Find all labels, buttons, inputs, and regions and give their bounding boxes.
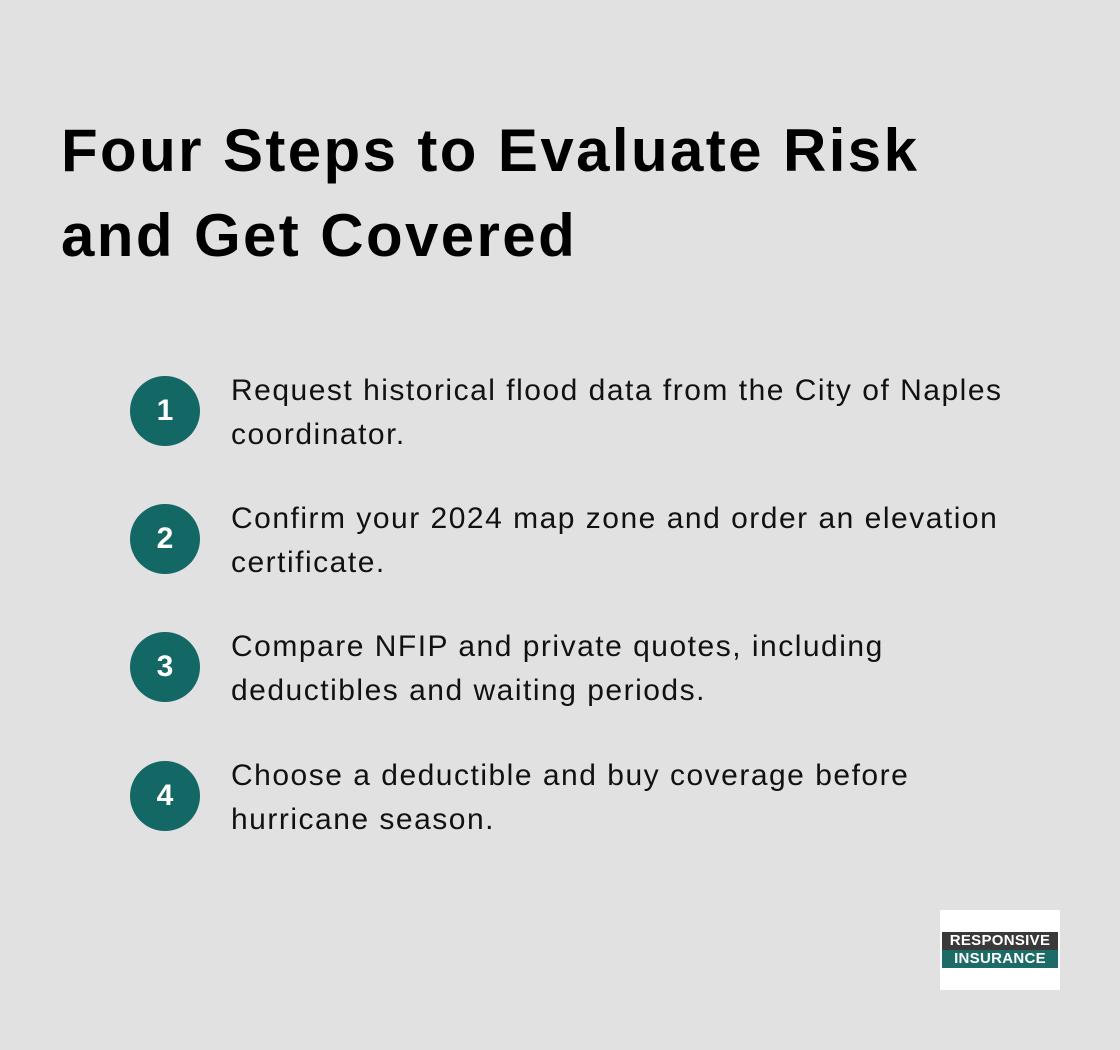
icon: number 4	[130, 761, 200, 831]
step 2 text	[231, 502, 998, 579]
step 3 text	[231, 630, 884, 707]
logo: RESPONSIVE	[950, 932, 1050, 949]
step 4 text: Choose a deductible and buy coverage before	[231, 759, 909, 792]
step 3 text: deductibles and waiting periods.	[231, 674, 706, 707]
icon: number 1: 1	[157, 394, 173, 427]
step 2 text: Confirm your 2024 map zone and order an elevation	[231, 502, 998, 535]
step 2 text: certificate.	[231, 546, 386, 579]
logo	[940, 910, 1060, 990]
icon: number 2	[130, 504, 200, 574]
title	[61, 117, 919, 269]
logo: INSURANCE	[954, 950, 1046, 967]
icon: number 3	[130, 632, 200, 702]
icon: number 3: 3	[157, 650, 173, 683]
step 4 text: hurricane season.	[231, 803, 495, 836]
title: and Get Covered	[61, 202, 577, 269]
icon: number 1	[130, 376, 200, 446]
title: Four Steps to Evaluate Risk	[61, 117, 919, 184]
step 1 text: coordinator.	[231, 418, 406, 451]
step 3	[130, 630, 884, 707]
step 4 text	[231, 759, 909, 836]
icon: number 4: 4	[157, 779, 173, 812]
icon: number 2: 2	[157, 522, 173, 555]
step 2	[130, 502, 998, 579]
step 1 text	[231, 374, 1003, 451]
step 1 text: Request historical flood data from the City of Naples	[231, 374, 1003, 407]
step 3 text: Compare NFIP and private quotes, including	[231, 630, 884, 663]
step 4	[130, 759, 909, 836]
step 1	[130, 374, 1003, 451]
